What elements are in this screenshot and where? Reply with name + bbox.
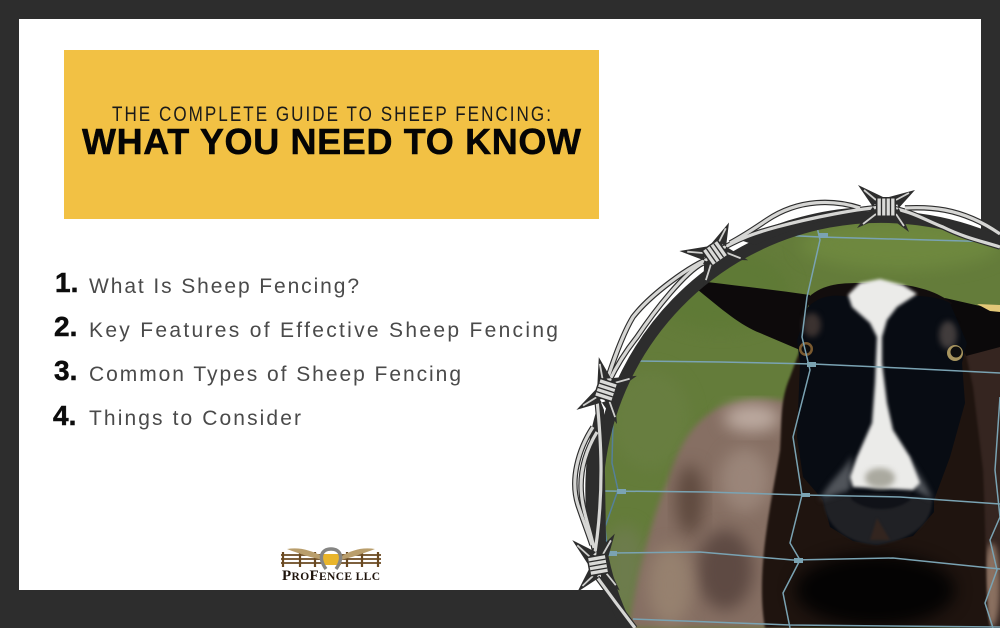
logo: horns: [287, 548, 375, 560]
dark band: [597, 217, 1000, 628]
right ear: [945, 298, 1000, 356]
barb 1: [857, 185, 915, 232]
barbed wire ring: [568, 185, 1000, 628]
head: [797, 296, 967, 545]
eyes: [799, 342, 813, 356]
item 1: [55, 267, 359, 298]
barb 2: [679, 218, 753, 290]
wire strands outline: [575, 202, 1000, 628]
brow highlights: [803, 313, 821, 337]
item 2: 2.: [54, 311, 77, 342]
muzzle: [823, 494, 932, 545]
item 3: 3.: [54, 355, 77, 386]
title banner: THE COMPLETE GUIDE TO SHEEP FENCING:: [112, 103, 553, 126]
dark crescent left: [585, 400, 606, 552]
wool crown: [808, 283, 946, 306]
logo: gold centre: [323, 554, 341, 565]
item 4: Things to Consider: [89, 407, 301, 430]
title banner: WHAT YOU NEED TO KNOW: [82, 121, 581, 162]
logo: fence rails: [283, 552, 378, 567]
logo: ProFence LLC: PROFENCE LLC: [282, 568, 380, 584]
barb 4: [568, 533, 625, 598]
wire strands light: [575, 202, 1000, 628]
fence wire: [603, 227, 1000, 628]
item 1: What Is Sheep Fencing?: [89, 275, 359, 298]
tag: [977, 304, 1000, 312]
logo: ProFence LLC: [281, 548, 381, 584]
sheep photo in circle: [596, 216, 1000, 628]
item 4: 4.: [53, 400, 76, 431]
white blaze: [848, 279, 920, 490]
wire knots: [608, 233, 828, 563]
item 1: 1.: [55, 267, 78, 298]
title banner: [64, 50, 599, 219]
dark crescent top: [740, 207, 886, 245]
item 3: Common Types of Sheep Fencing: [89, 363, 461, 386]
wool highlights: [724, 404, 780, 432]
dark neck wool: [762, 350, 990, 628]
item 3: [54, 355, 461, 386]
background brown right of head: [960, 340, 1000, 628]
item 4: [53, 400, 301, 431]
grass background: [596, 216, 1000, 628]
blurred wool body: [628, 399, 800, 628]
numbered list: [53, 267, 558, 431]
muzzle speckle: [820, 455, 933, 500]
item 2: Key Features of Effective Sheep Fencing: [89, 319, 558, 342]
nose: [851, 493, 910, 509]
barb 3: [576, 356, 639, 425]
left ear: [692, 282, 810, 350]
item 2: [54, 311, 558, 342]
logo: horseshoe: [321, 549, 341, 569]
